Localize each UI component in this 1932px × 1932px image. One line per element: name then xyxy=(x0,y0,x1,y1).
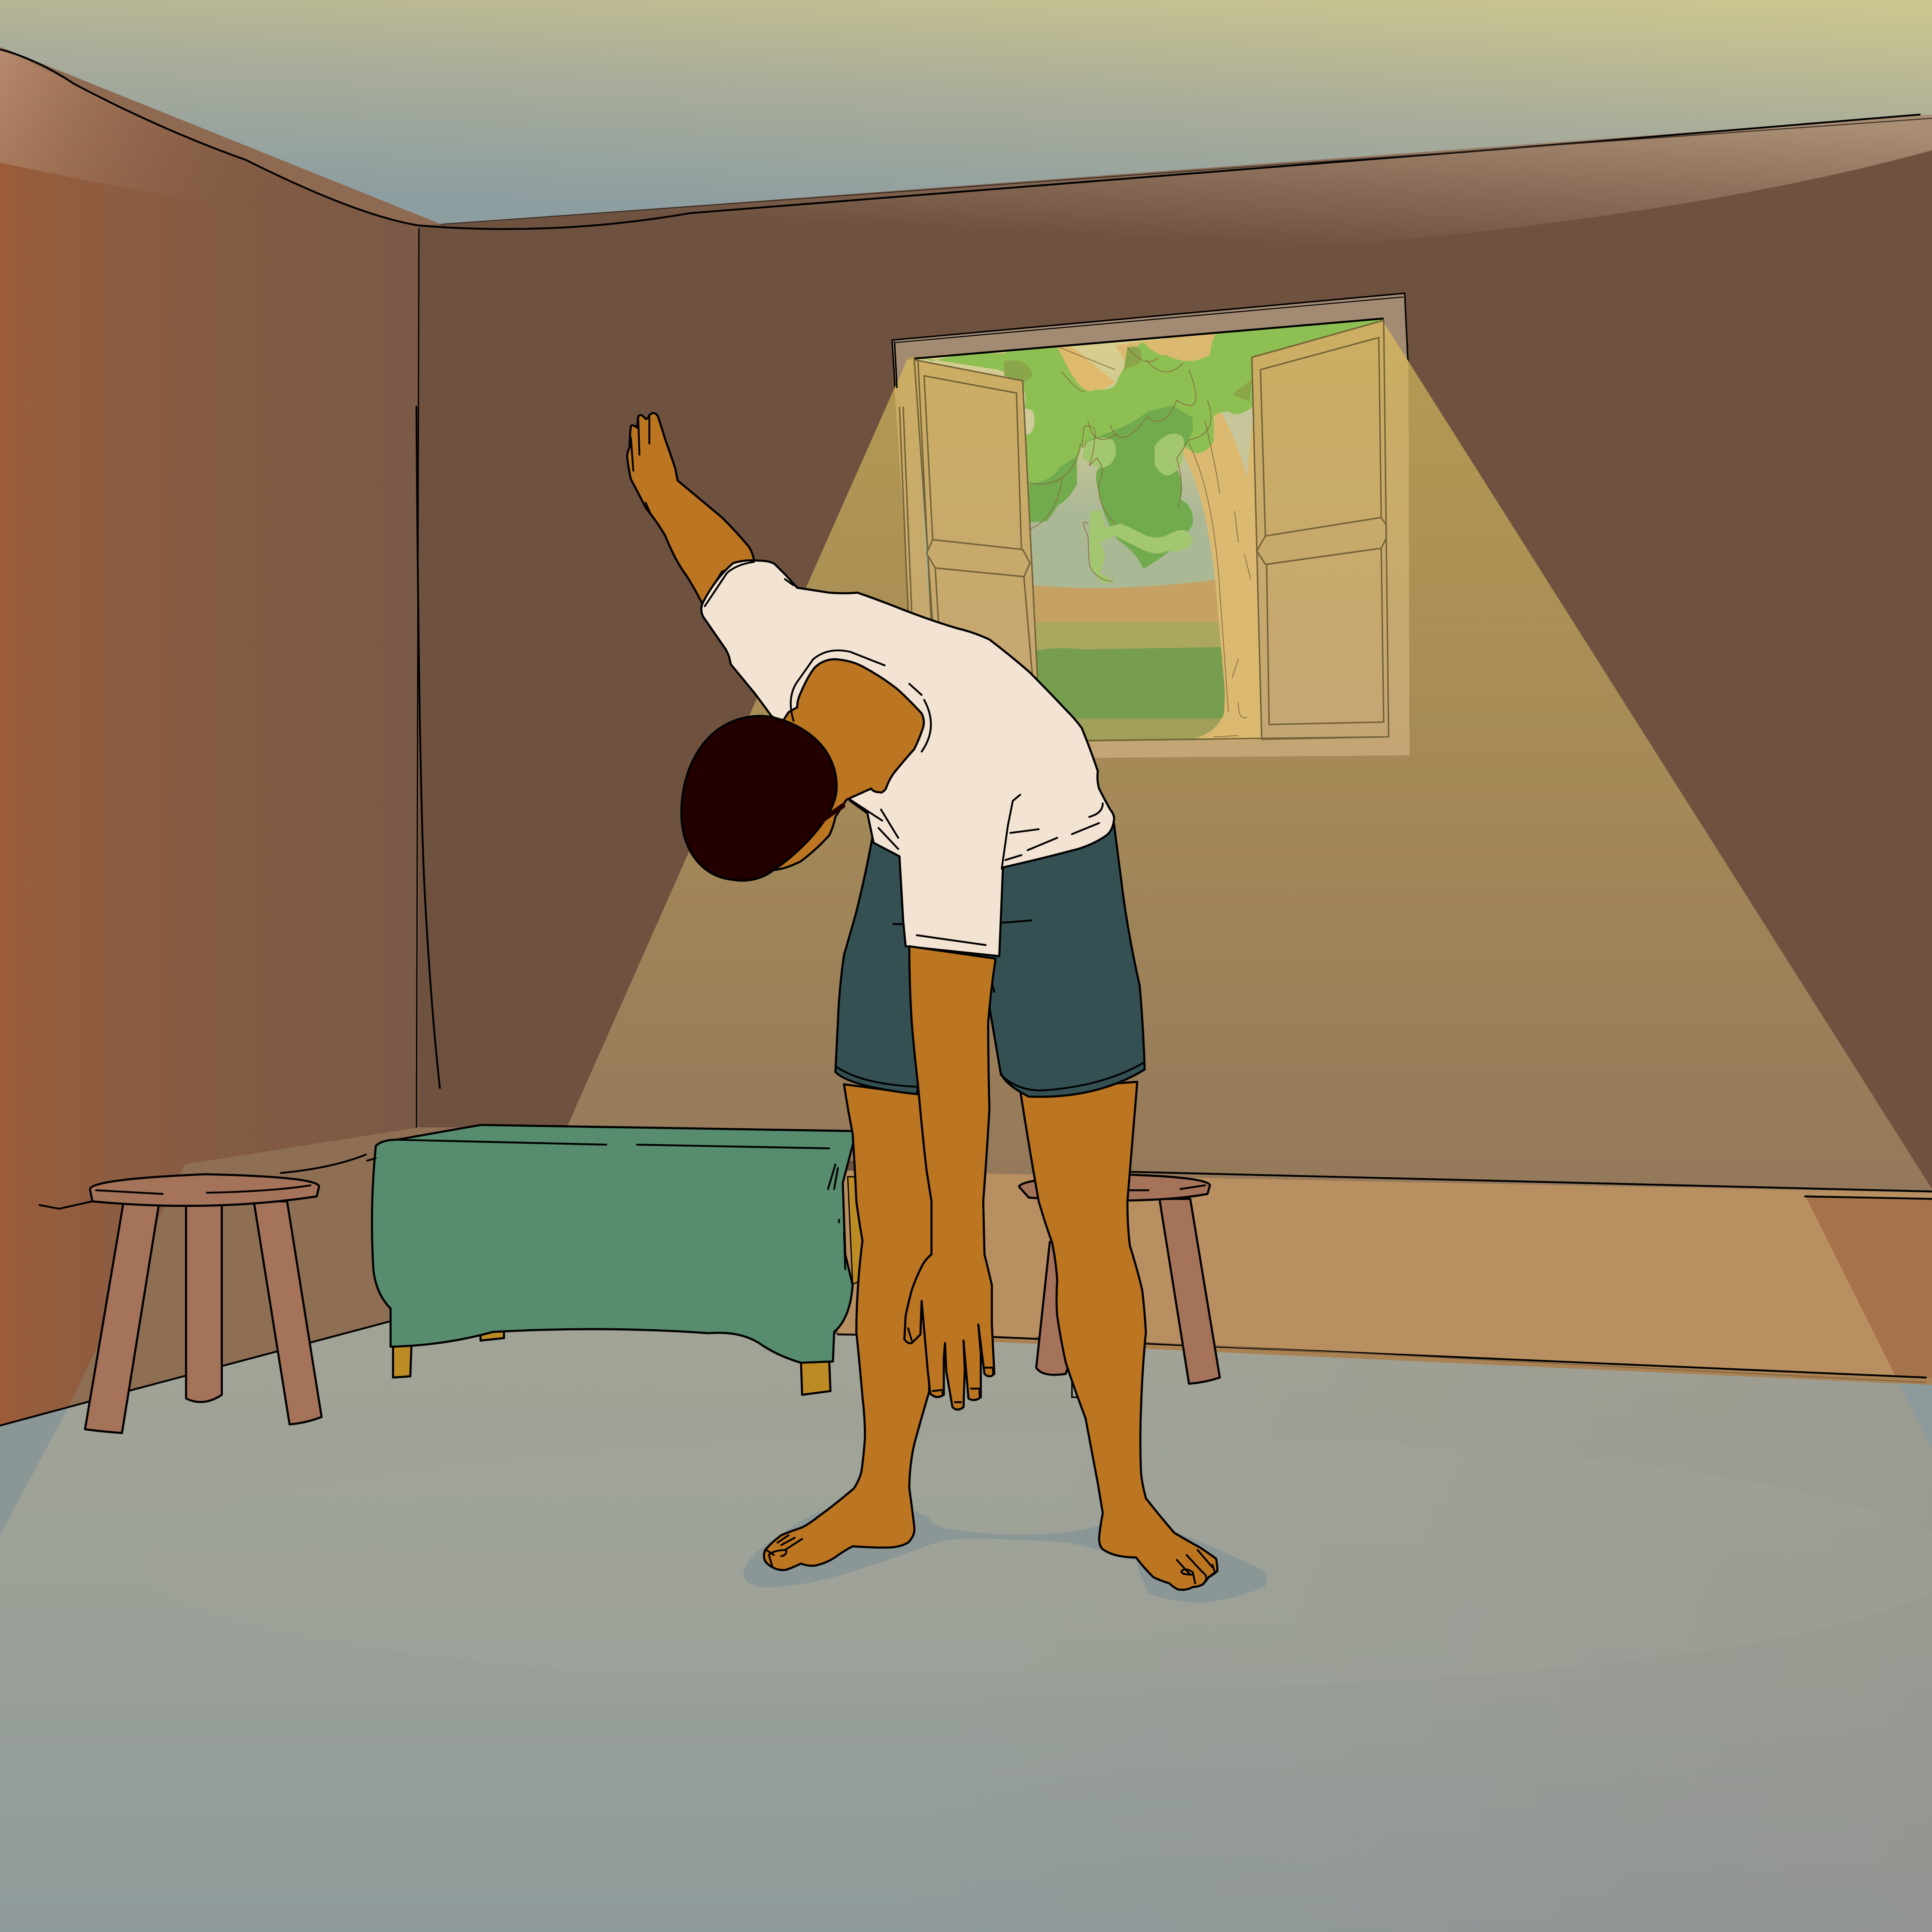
window frame xyxy=(892,293,1410,758)
unlit floor patch xyxy=(1898,1381,1932,1449)
left ceiling trim xyxy=(0,47,441,225)
unlit floor corner xyxy=(0,1406,69,1535)
window opening top edge xyxy=(914,319,1384,358)
tree trunk xyxy=(1115,333,1269,742)
wall crack line xyxy=(416,407,440,1088)
distant tan branches xyxy=(1057,346,1115,391)
light beam on lower back wall xyxy=(838,1170,1932,1382)
unlit lower wall patch xyxy=(1805,1195,1932,1382)
green table cloth xyxy=(367,1125,857,1363)
ground band lower xyxy=(1029,718,1238,743)
ground band green xyxy=(1029,647,1232,721)
left frame inner lines xyxy=(895,297,1403,614)
ceiling outline xyxy=(0,49,1920,229)
light beam on back wall xyxy=(567,320,1932,1195)
tree foliage pale lower clump xyxy=(1089,510,1193,584)
floor light pool xyxy=(142,1434,1932,1691)
tree foliage left lower xyxy=(1029,456,1077,522)
hair xyxy=(681,716,837,881)
pale sky gap in foliage xyxy=(1023,408,1035,435)
toes xyxy=(766,1535,1215,1585)
right leg xyxy=(1020,1082,1217,1590)
hanging arm and hand xyxy=(905,946,996,1410)
back wall top haze xyxy=(441,115,1932,263)
tree foliage pale patch middle xyxy=(1082,438,1116,468)
wall base lines xyxy=(0,1154,1932,1425)
tree foliage dark xyxy=(1088,405,1193,569)
tree foliage light xyxy=(918,314,1386,484)
left window shutter xyxy=(914,360,1037,677)
raised arm xyxy=(627,413,754,604)
foliage dark top patches xyxy=(1004,346,1252,402)
shirt detail lines xyxy=(705,562,1103,945)
person xyxy=(627,413,1217,1590)
shirt xyxy=(702,560,1114,956)
window view xyxy=(912,314,1392,743)
stool legs xyxy=(85,1204,159,1433)
light beam on left wall xyxy=(69,1127,567,1406)
window lit frame xyxy=(895,320,1410,758)
right stool xyxy=(1019,1174,1220,1397)
table legs xyxy=(393,1328,830,1395)
ceiling xyxy=(0,0,1932,224)
back wall xyxy=(419,115,1932,1385)
stool seat xyxy=(90,1174,319,1206)
right window shutter xyxy=(1252,320,1388,739)
ground band tan xyxy=(1034,580,1219,622)
room corner line xyxy=(416,228,419,1127)
stool legs xyxy=(1160,1199,1220,1384)
shorts xyxy=(835,823,1145,1097)
sky wedge beside trunk xyxy=(1218,401,1255,477)
ear xyxy=(814,806,843,826)
table leg behind cloth xyxy=(848,1177,864,1284)
foliage outlines xyxy=(1029,347,1251,737)
left wall top haze xyxy=(0,47,419,234)
window sill line xyxy=(1088,737,1388,741)
stool seat xyxy=(1019,1174,1210,1200)
left wall xyxy=(0,47,419,1429)
tree foliage pale patch right xyxy=(1154,434,1184,476)
shirt neck opening skin xyxy=(739,659,924,870)
ground band olive xyxy=(1036,622,1221,651)
floor skirting band xyxy=(992,1337,1932,1385)
foot shadow xyxy=(744,1510,1267,1603)
left leg xyxy=(764,1084,936,1570)
left stool xyxy=(85,1174,322,1433)
floor xyxy=(0,1321,1932,1932)
